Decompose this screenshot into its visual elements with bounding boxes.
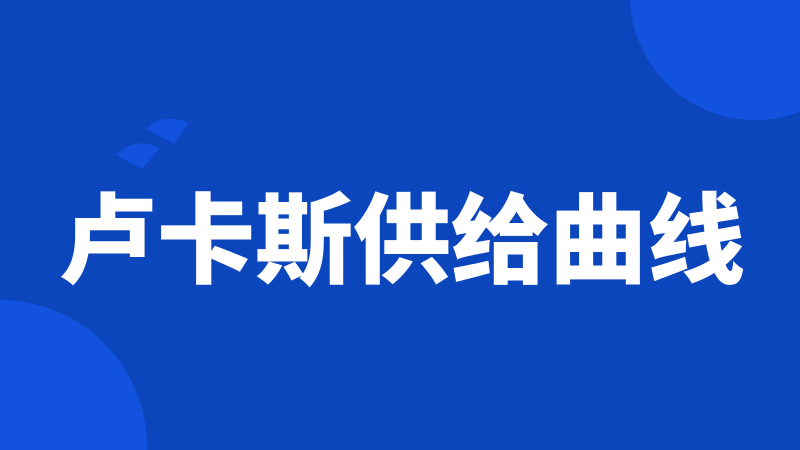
title: 卢卡斯供给曲线	[59, 186, 745, 296]
icon: logo wedges	[116, 119, 189, 169]
circle: bottom left decoration	[0, 300, 147, 450]
circle: top right decoration	[630, 0, 800, 120]
